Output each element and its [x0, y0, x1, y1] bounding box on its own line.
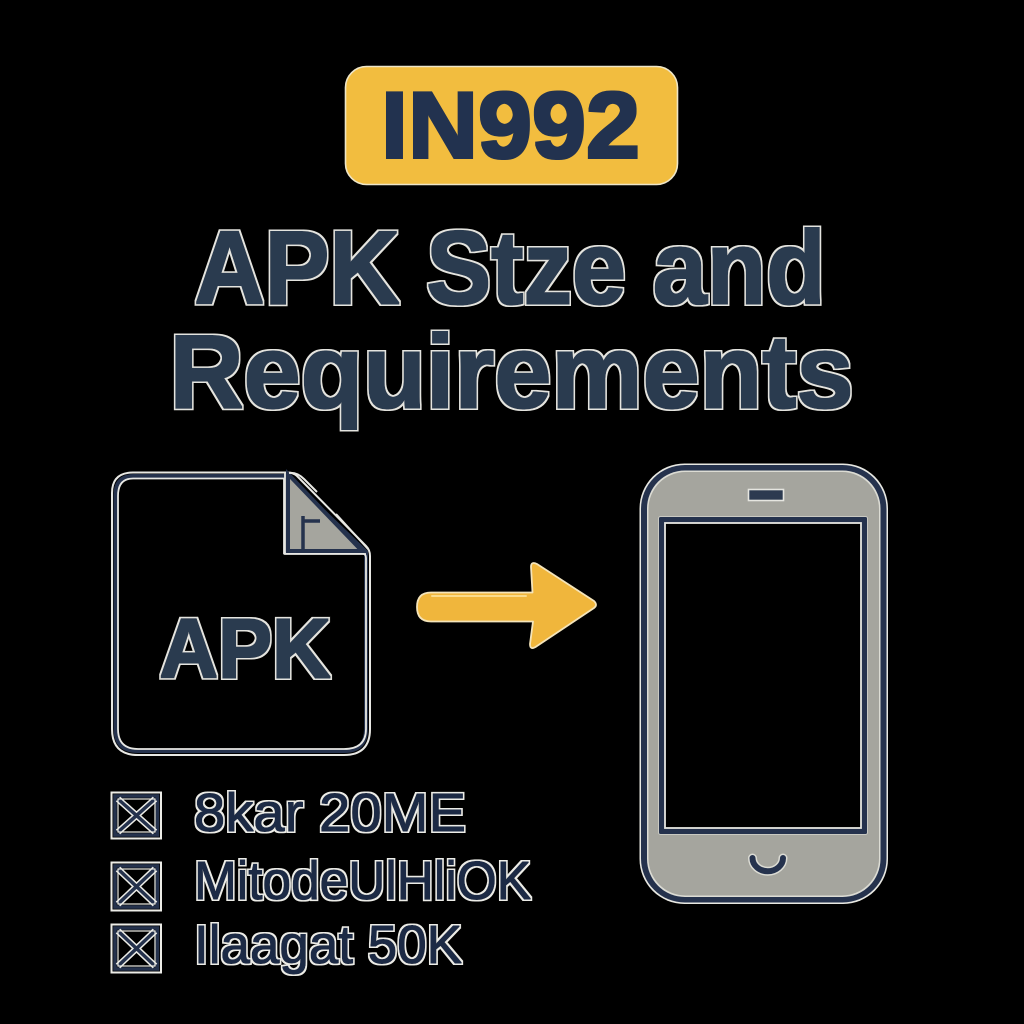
item 2: MitodeUlHliOK — [194, 851, 531, 911]
icon: phone — [640, 464, 888, 904]
checkbox 1 — [112, 792, 161, 838]
badge: IN992: IN992 — [381, 72, 640, 178]
speaker — [748, 490, 784, 500]
icon: APK file — [112, 472, 370, 755]
item 3: Ilaagat 50K — [194, 915, 462, 975]
requirements checklist — [112, 783, 531, 975]
badge: IN992 — [346, 66, 678, 184]
arrow — [417, 563, 596, 648]
checkbox 3 — [112, 924, 161, 972]
APK label: APK — [160, 602, 330, 696]
title — [170, 210, 854, 430]
screen — [658, 516, 868, 834]
fold corner — [285, 473, 368, 554]
checkbox 2 — [112, 862, 161, 910]
title: APK Stze and — [194, 210, 826, 326]
title: Requirements — [170, 314, 854, 430]
item 1: 8kar 20ME — [194, 783, 466, 843]
home button — [752, 858, 783, 871]
